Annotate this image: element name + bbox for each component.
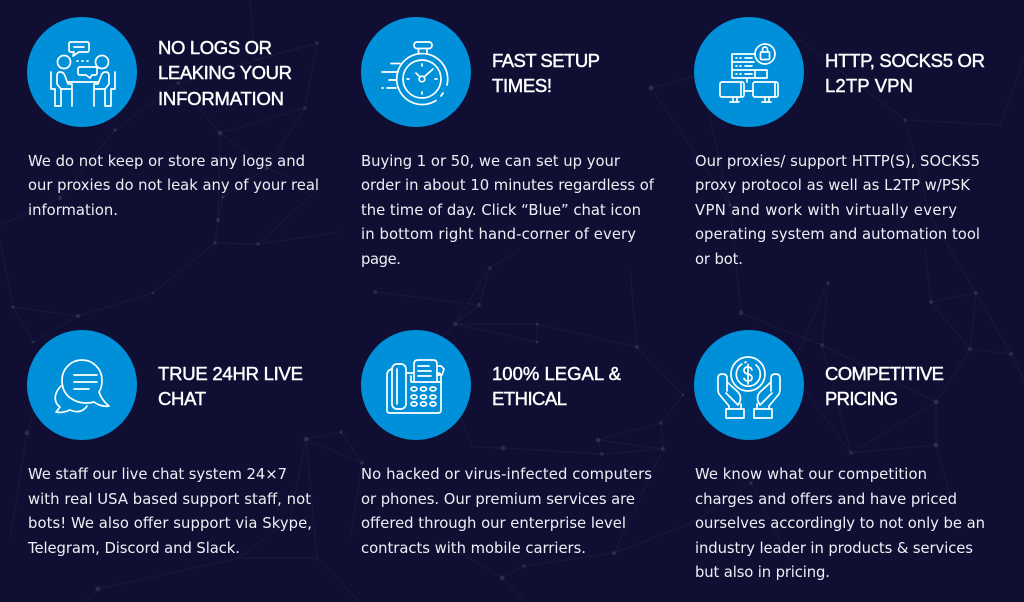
text: legal description: or phones. Our premium services are <box>361 491 635 508</box>
icon: servers, lock and monitors <box>694 17 804 127</box>
icon: fax telephone <box>361 330 471 440</box>
text: pricing description: We know what our competition <box>695 466 927 483</box>
heading: protocols: L2TP VPN <box>825 75 913 96</box>
text: fast setup description: page. <box>361 251 401 268</box>
heading: fast setup: TIMES! <box>492 75 552 96</box>
text: legal description: offered through our enterprise level <box>361 515 626 532</box>
text: protocols description: operating system and automation tool <box>695 226 980 243</box>
heading: live chat: TRUE 24HR LIVE <box>158 363 303 384</box>
text: no logs description: We do not keep or store any logs and <box>28 153 305 170</box>
panel: live chat <box>27 330 312 557</box>
heading: no logs: LEAKING YOUR <box>158 62 292 83</box>
text: pricing description: industry leader in products & services <box>695 540 973 557</box>
text: protocols description: proxy protocol as well as L2TP w/PSK <box>695 177 971 194</box>
text: protocols description: or bot. <box>695 251 743 268</box>
text: pricing description: charges and offers and have priced <box>695 491 957 508</box>
panel: pricing <box>694 330 985 581</box>
text: live chat description: with real USA based support staff, not <box>28 491 311 508</box>
heading: legal: ETHICAL <box>492 388 567 409</box>
text: fast setup description: Buying 1 or 50, we can set up your <box>361 153 621 170</box>
panel: legal <box>361 330 652 557</box>
text: no logs description: our proxies do not leak any of your real <box>28 177 319 194</box>
heading: pricing: PRICING <box>825 388 898 409</box>
heading: legal: 100% LEGAL & <box>492 363 622 384</box>
heading: pricing: COMPETITIVE <box>825 363 944 384</box>
icon: chat bubbles <box>27 330 137 440</box>
text: live chat description: We staff our live chat system 24×7 <box>28 466 287 483</box>
text: fast setup description: order in about 10 minutes regardless of <box>361 177 655 194</box>
panel: protocols <box>694 17 985 268</box>
icon: people talking at a table <box>27 17 137 127</box>
icon: hands holding a coin <box>694 330 804 440</box>
icon: stopwatch <box>361 17 471 127</box>
text: legal description: No hacked or virus-infected computers <box>361 466 652 483</box>
text: live chat description: bots! We also offer support via Skype, <box>28 515 312 532</box>
text: protocols description: VPN and work with virtually every <box>695 202 957 219</box>
text: fast setup description: the time of day. Click “Blue” chat icon <box>361 202 641 219</box>
text: legal description: contracts with mobile carriers. <box>361 540 586 557</box>
text: no logs description: information. <box>28 202 118 219</box>
text: fast setup description: in bottom right hand-corner of every <box>361 226 636 243</box>
text: pricing description: but also in pricing. <box>695 564 830 581</box>
panel: no logs <box>27 17 319 219</box>
heading: no logs: INFORMATION <box>158 88 284 109</box>
text: protocols description: Our proxies/ support HTTP(S), SOCKS5 <box>695 153 980 170</box>
heading: no logs: NO LOGS OR <box>158 37 272 58</box>
heading: live chat: CHAT <box>158 388 206 409</box>
heading: fast setup: FAST SETUP <box>492 50 600 71</box>
text: live chat description: Telegram, Discord and Slack. <box>27 540 240 557</box>
heading: protocols: HTTP, SOCKS5 OR <box>825 50 985 71</box>
panel: fast setup <box>361 17 655 268</box>
text: pricing description: ourselves accordingly to not only be an <box>695 515 985 532</box>
